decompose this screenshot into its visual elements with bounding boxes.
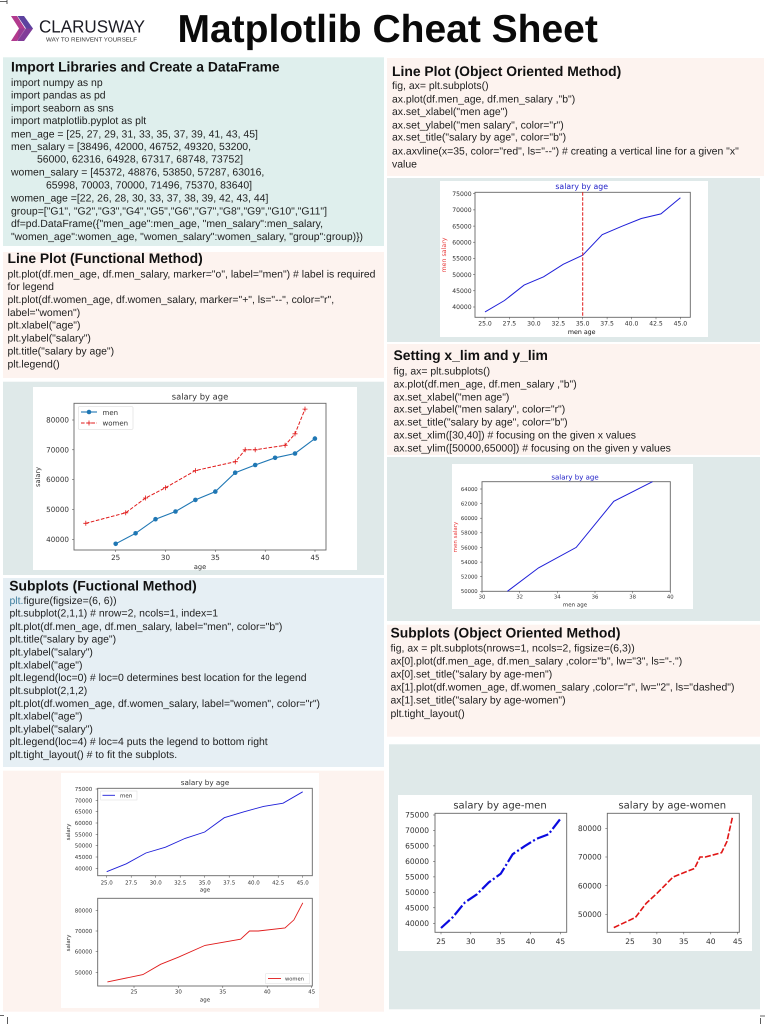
x axis ticks: 36: [592, 594, 599, 600]
code block: line plot object oriented: value: [392, 159, 417, 170]
code block: line plot functional: plt.title("salary by age"): [8, 347, 114, 358]
right chart: women: 60000: [578, 881, 602, 890]
series: men: [485, 198, 680, 312]
code block: line plot object oriented: fig, ax= plt.subplots(): [392, 81, 489, 92]
code block: subplots object oriented: ax[1].plot(df.women_age, df.women_salary ,color="r", lw="2", ls="dashed"): [390, 683, 734, 694]
bottom subplot: women: 50000: [75, 969, 93, 976]
code block: line plot functional: [8, 269, 376, 370]
top subplot: men: men: [120, 794, 133, 800]
logo wordmark: CLARUSWAY: [39, 16, 145, 36]
left chart: men: 60000: [405, 857, 429, 866]
code block: subplots functional: plt.xlabel("age"): [10, 660, 82, 671]
code block: line plot object oriented: [392, 81, 739, 170]
y axis ticks: 70000: [452, 207, 472, 214]
heading: import libraries: Import Libraries and Create a DataFrame: [11, 58, 280, 74]
x axis ticks: 30: [161, 553, 170, 562]
code block: subplots object oriented: ax[1].set_title("salary by age-women"): [390, 696, 566, 707]
code block: setting limits: ax.set_ylim([50000,65000]) # focusing on the given y values: [394, 443, 671, 454]
y axis ticks: 56000: [461, 545, 478, 551]
top subplot: men: 70000: [75, 797, 93, 804]
left chart: men: 30: [466, 937, 476, 946]
chart title: salary by age: [172, 391, 228, 401]
code block: subplots functional: plt.plot(df.men_age, df.men_salary, label="men", color="b"): [10, 622, 282, 633]
left chart: men: [405, 800, 567, 946]
code block: imports and data: df=pd.DataFrame({"men_age":men_age, "men_salary":men_salary,: [11, 219, 323, 230]
heading: line plot object oriented: Line Plot (Object Oriented Method): [392, 63, 621, 79]
panel: line plot object oriented: [387, 58, 764, 176]
x axis ticks: 32.5: [552, 321, 565, 328]
code block: line plot object oriented: ax.set_title("salary by age", color="b"): [392, 133, 566, 144]
code block: subplots functional: plt.ylabel("salary"): [10, 647, 93, 658]
chart title: salary by age: [555, 182, 608, 191]
right chart: women: 45: [733, 937, 743, 946]
code block: setting limits: ax.set_title("salary by age", color="b"): [394, 418, 568, 429]
code block: subplots functional: plt.ylabel("salary"): [10, 725, 93, 736]
x axis ticks: [479, 594, 674, 600]
panel: import libraries: [3, 57, 384, 246]
bottom subplot: women: women: [285, 976, 304, 982]
code block: imports and data: women_salary = [45372, 48876, 53850, 57287, 63016,: [10, 168, 264, 179]
icon: chevrons: [11, 16, 33, 41]
code block: imports and data: import pandas as pd: [11, 91, 106, 102]
y axis ticks: 58000: [461, 531, 478, 537]
code block: line plot functional: for legend: [8, 282, 54, 293]
y axis ticks: 40000: [452, 304, 472, 311]
top subplot: men: 27.5: [125, 879, 138, 886]
x axis ticks: 38: [629, 594, 637, 600]
line chart: limited axes: [452, 464, 693, 609]
bottom subplot: women: 30: [175, 988, 182, 995]
x axis ticks: 40: [667, 594, 674, 600]
code block: line plot functional: label="women"): [8, 308, 80, 319]
x axis ticks: 40.0: [625, 321, 639, 328]
panel: limited axes chart: [387, 457, 760, 621]
code block: imports and data: women_age =[22, 26, 28, 30, 33, 37, 38, 39, 42, 43, 44]: [10, 194, 268, 205]
left chart: men: 55000: [405, 873, 429, 882]
left chart: men: 40000: [405, 919, 429, 928]
bottom subplot: women: 25: [130, 988, 138, 995]
top subplot: men: 65000: [75, 809, 93, 816]
top subplot: men: 45.0: [297, 879, 309, 886]
code block: setting limits: ax.set_ylabel("men salary", color="r"): [394, 405, 565, 416]
right chart: women: 50000: [578, 910, 602, 919]
legend: [78, 407, 133, 429]
code block: line plot functional: plt.ylabel("salary"): [8, 334, 91, 345]
top subplot: men: salary: [65, 823, 72, 840]
y axis ticks: 52000: [461, 575, 478, 581]
logo: Clarusway: [11, 16, 145, 44]
x axis ticks: 27.5: [503, 321, 516, 328]
left chart: men: 65000: [405, 842, 429, 851]
bottom subplot: women: salary: [65, 934, 72, 951]
code block: subplots functional: plt.figure(figsize=(6, 6)): [10, 596, 117, 607]
top subplot: men: 50000: [75, 843, 93, 850]
series: men: [507, 482, 652, 591]
panel: subplots functional: [3, 577, 384, 767]
code block: subplots functional: plt.title("salary by age"): [10, 635, 116, 646]
right chart: women: salary by age-women: [618, 800, 726, 811]
code block: imports and data: import numpy as np: [11, 78, 103, 89]
bottom subplot: women: 45: [308, 988, 316, 995]
top subplot: men: 25.0: [101, 879, 113, 886]
right chart: women: 70000: [578, 853, 602, 862]
code block: line plot object oriented: ax.axvline(x=35, color="red", ls="--") # creating a vertical line for a given "x": [392, 146, 739, 157]
panel: line plot chart: [3, 382, 384, 575]
heading: setting limits: Setting x_lim and y_lim: [394, 347, 548, 363]
top subplot: men: 32.5: [174, 879, 187, 886]
code block: imports and data: men_salary = [38496, 42000, 46752, 49320, 53200,: [11, 142, 251, 153]
x axis ticks: 42.5: [649, 321, 663, 328]
chart title: salary by age: [181, 778, 230, 787]
bottom subplot: women: 40: [264, 988, 271, 995]
left chart: men: 75000: [405, 811, 429, 820]
x axis ticks: 25: [111, 553, 120, 562]
top subplot: men: 35.0: [199, 879, 211, 886]
y axis ticks: 80000: [46, 416, 69, 424]
y axis ticks: 60000: [461, 516, 478, 522]
left chart: men: 70000: [405, 826, 429, 835]
code block: subplots functional: plt.tight_layout() # to fit the subplots.: [10, 750, 177, 761]
x axis ticks: 30.0: [527, 321, 541, 328]
x axis ticks: 25.0: [478, 321, 492, 328]
x axis label: men age: [563, 602, 588, 608]
code block: subplots object oriented: ax[0].plot(df.men_age, df.men_salary ,color="b", lw="3", ls="-."): [390, 657, 682, 668]
y axis label: salary: [34, 467, 42, 487]
y axis ticks: 62000: [461, 502, 478, 508]
code block: line plot functional: plt.legend(): [8, 359, 60, 370]
series: women: [83, 407, 308, 526]
code block: setting limits: ax.plot(df.men_age, df.men_salary ,"b"): [394, 380, 577, 391]
x axis ticks: 35: [211, 553, 220, 562]
y axis label: men salary: [452, 521, 459, 552]
code block: line plot functional: plt.plot(df.women_age, df.women_salary, marker="+", ls="--", color="r",: [8, 295, 334, 306]
y axis ticks: 75000: [452, 191, 472, 198]
line chart: salary by age with vertical line: [440, 181, 708, 337]
code block: imports and data: import seaborn as sns: [11, 103, 114, 114]
code block: setting limits: fig, ax= plt.subplots(): [394, 366, 490, 377]
code block: line plot object oriented: ax.set_ylabel("men salary", color="r"): [392, 120, 564, 131]
left chart: men: 50000: [405, 888, 429, 897]
left chart: men: 45: [556, 937, 565, 946]
x axis ticks: 45.0: [674, 321, 687, 328]
y axis ticks: 70000: [46, 445, 69, 454]
x axis label: men age: [568, 329, 596, 336]
y axis ticks: 54000: [461, 560, 478, 566]
y axis ticks: [461, 487, 478, 595]
code block: setting limits: ax.set_xlim([30,40]) # focusing on the given x values: [394, 431, 636, 442]
left chart: men: 35: [496, 937, 506, 946]
heading: subplots object oriented: Subplots (Object Oriented Method): [390, 624, 620, 640]
code block: imports and data: 65998, 70003, 70000, 71496, 75370, 83640]: [46, 180, 252, 191]
panel: subplots functional chart: [3, 771, 384, 1012]
stacked line charts: men and women: [61, 773, 319, 1008]
bottom subplot: women: 80000: [75, 907, 93, 914]
title: Matplotlib Cheat Sheet: [178, 8, 598, 51]
panel: setting limits: [387, 344, 760, 455]
left chart: men: 45000: [405, 904, 429, 912]
code block: subplots object oriented: [390, 643, 734, 720]
y axis ticks: [46, 416, 69, 544]
x axis label: age: [194, 563, 206, 571]
x axis ticks: 30: [479, 594, 486, 600]
y axis ticks: [452, 191, 472, 311]
top subplot: men: 42.5: [272, 879, 285, 886]
bottom subplot: women: 60000: [75, 949, 93, 956]
x axis ticks: 45: [310, 553, 320, 562]
code block: line plot functional: plt.plot(df.men_age, df.men_salary, marker="o", label="men") # label is required: [8, 269, 376, 280]
panel: side by side charts: [389, 744, 760, 1009]
right chart: women: 25: [625, 937, 635, 946]
code block: imports and data: import matplotlib.pyplot as plt: [11, 116, 146, 127]
left chart: men: salary by age-men: [453, 800, 547, 811]
top subplot: men: 30.0: [150, 879, 162, 886]
code block: imports and data: group=["G1", "G2","G3","G4","G5","G6","G7","G8","G9","G10","G11"]: [11, 206, 327, 217]
code block: subplots functional: plt.plot(df.women_age, df.women_salary, label="women", color="r"): [10, 699, 320, 710]
y axis ticks: 50000: [461, 589, 478, 595]
y axis ticks: 60000: [452, 239, 472, 246]
code block: subplots functional: plt.subplot(2,1,1) # nrow=2, ncols=1, index=1: [10, 609, 218, 620]
bottom subplot: women: 70000: [75, 928, 93, 935]
y axis ticks: 40000: [46, 535, 69, 544]
top subplot: men: 75000: [75, 786, 93, 793]
right chart: women: 40: [706, 937, 716, 946]
top subplot: men: 55000: [75, 831, 93, 838]
code block: imports and data: "women_age":women_age, "women_salary":women_salary, "group":group)}): [11, 232, 363, 243]
bottom subplot: women: 35: [219, 988, 227, 995]
series: men: [113, 436, 317, 546]
line chart: salary by age, men and women: [33, 387, 357, 571]
x axis ticks: 40: [261, 553, 270, 562]
side by side line charts: [398, 795, 752, 951]
right chart: women: 80000: [578, 824, 602, 833]
code block: imports and data: [10, 78, 363, 243]
panel: subplots object oriented: [387, 624, 760, 737]
logo tagline: WAY TO REINVENT YOURSELF: [46, 37, 137, 44]
x axis ticks: 32: [516, 594, 523, 600]
x axis ticks: [478, 321, 687, 328]
y axis ticks: 65000: [452, 223, 472, 230]
panel: vertical line chart: [387, 178, 760, 342]
code block: subplots functional: plt.subplot(2,1,2): [10, 686, 87, 697]
code block: setting limits: [394, 366, 671, 454]
legend: men: [102, 409, 118, 417]
code block: subplots object oriented: plt.tight_layout(): [390, 709, 465, 720]
code block: setting limits: ax.set_xlabel("men age"): [394, 392, 509, 403]
y axis ticks: 64000: [461, 487, 478, 493]
code block: line plot object oriented: ax.set_xlabel("men age"): [392, 107, 508, 118]
bottom subplot: women: age: [200, 998, 211, 1004]
code block: imports and data: men_age = [25, 27, 29, 31, 33, 35, 37, 39, 41, 43, 45]: [11, 129, 258, 140]
right chart: women: 30: [652, 937, 662, 946]
right chart: women: [578, 800, 743, 946]
bottom subplot: women: [65, 898, 316, 1004]
y axis ticks: 50000: [46, 505, 69, 514]
top subplot: men: age: [200, 888, 211, 894]
y axis ticks: 45000: [452, 288, 472, 295]
panel: line plot functional: [3, 250, 384, 378]
right chart: women: 35: [679, 937, 689, 946]
x axis ticks: 35.0: [576, 321, 590, 328]
code block: subplots functional: plt.xlabel("age"): [10, 712, 82, 723]
x axis ticks: [111, 553, 320, 562]
y axis ticks: 50000: [452, 272, 472, 279]
y axis label: men salary: [441, 237, 448, 273]
code block: subplots object oriented: ax[0].set_title("salary by age-men"): [390, 670, 552, 681]
top subplot: men: 37.5: [223, 879, 236, 886]
vertical line at age 35: [582, 192, 584, 317]
heading: line plot functional: Line Plot (Functional Method): [8, 250, 203, 266]
left chart: men: 25: [436, 937, 446, 946]
top subplot: men: 40.0: [248, 879, 260, 886]
code block: subplots functional: plt.legend(loc=0) # loc=0 determines best location for the legend: [10, 673, 307, 684]
chart title: salary by age: [551, 473, 599, 481]
top subplot: men: [65, 786, 312, 894]
code block: subplots functional: [10, 596, 320, 761]
x axis ticks: 34: [554, 594, 561, 600]
x axis ticks: 37.5: [600, 321, 614, 328]
y axis ticks: 60000: [46, 475, 69, 484]
y axis ticks: 55000: [452, 256, 472, 263]
left chart: men: 40: [526, 937, 535, 946]
top subplot: men: 45000: [75, 854, 93, 861]
code block: subplots functional: plt.legend(loc=4) # loc=4 puts the legend to bottom right: [10, 737, 268, 748]
top subplot: men: 60000: [75, 820, 93, 827]
heading: subplots functional: Subplots (Fuctional Method): [9, 577, 197, 593]
top subplot: men: 40000: [75, 865, 93, 872]
code block: line plot functional: plt.xlabel("age"): [8, 321, 80, 332]
code block: line plot object oriented: ax.plot(df.men_age, df.men_salary ,"b"): [392, 95, 575, 106]
code block: imports and data: 56000, 62316, 64928, 67317, 68748, 73752]: [37, 155, 243, 166]
legend: women: [102, 420, 128, 428]
code block: subplots object oriented: fig, ax = plt.subplots(nrows=1, ncols=2, figsize=(6,3)): [390, 643, 635, 654]
